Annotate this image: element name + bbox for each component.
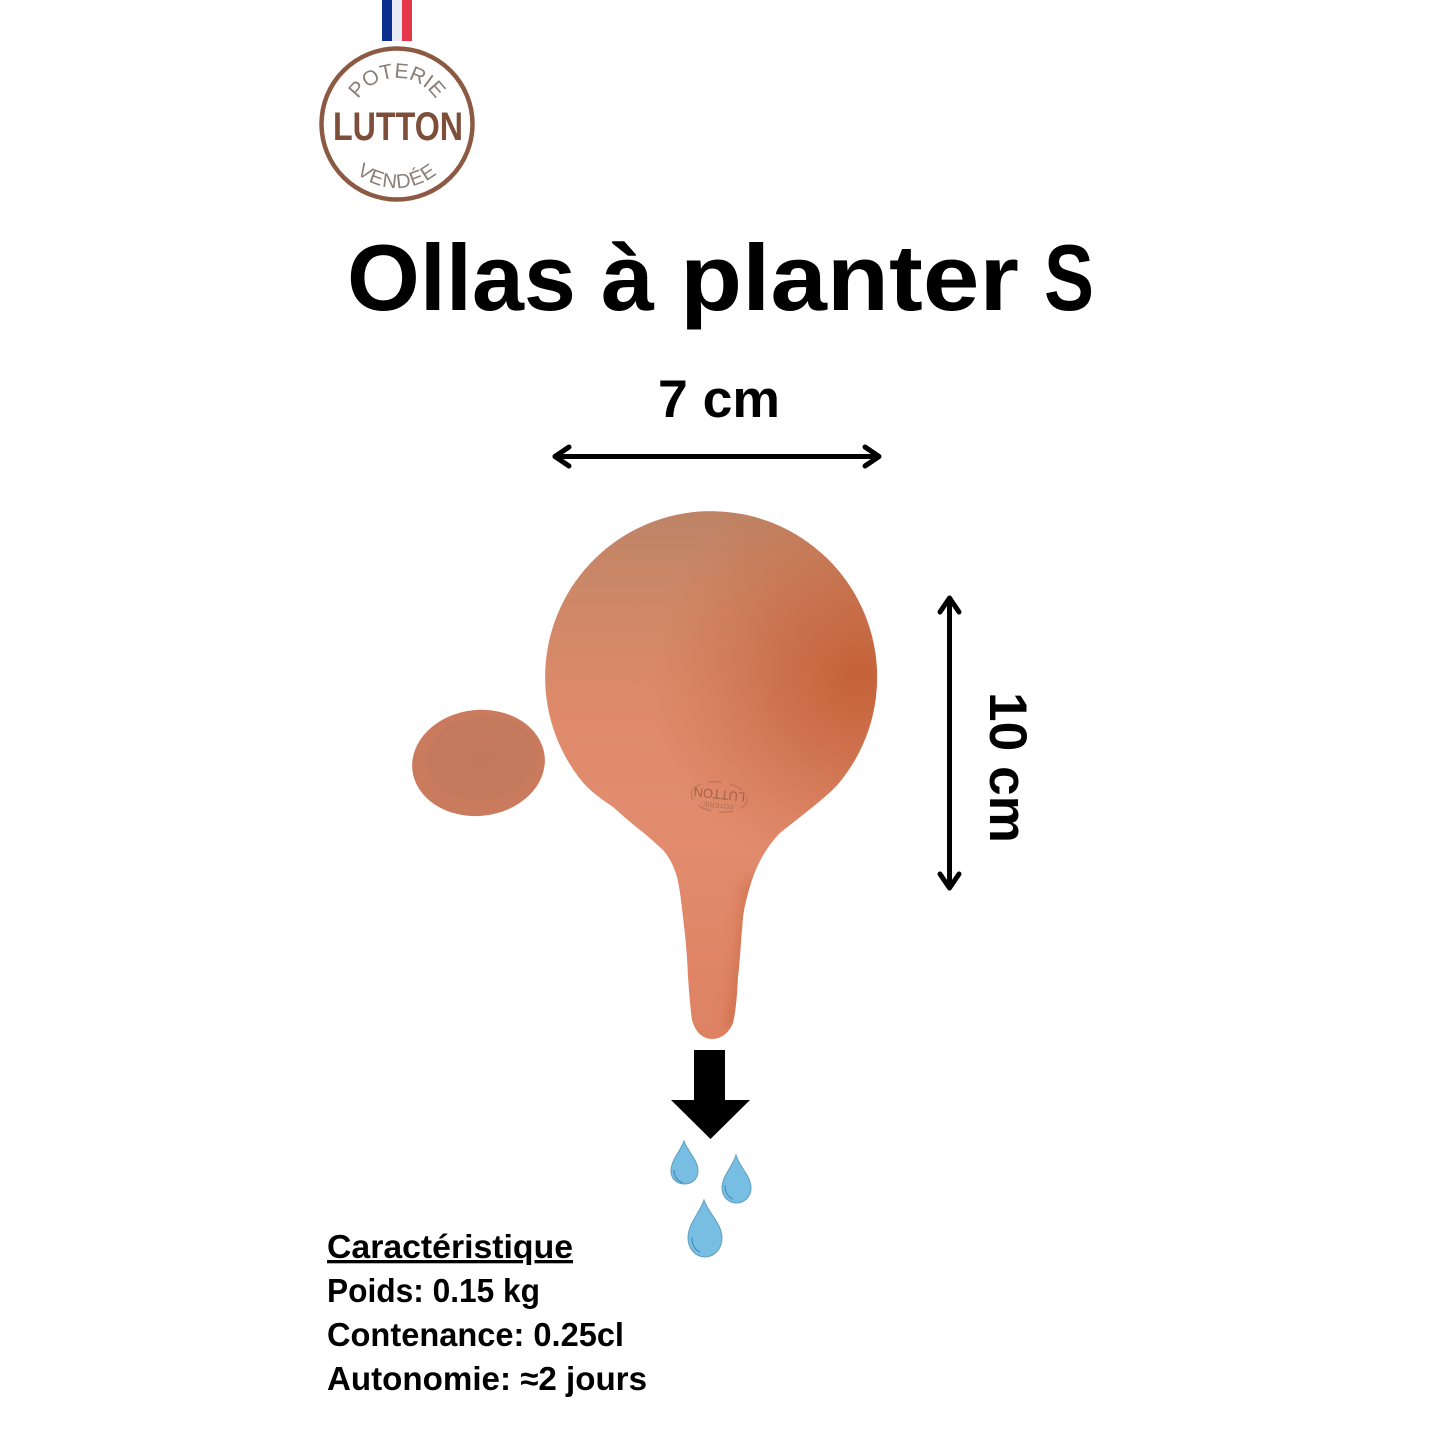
height label: 10 cm: 10 cm [978,692,1037,843]
arrow: height dimension [940,598,959,888]
weight: Poids: 0.15 kg [327,1272,540,1309]
saucer lid [407,703,550,823]
capacity: Contenance: 0.25cl [327,1316,624,1353]
logo text: VENDÉE: VENDÉE [360,162,436,188]
icon: water drop right [722,1155,751,1203]
icon: French flag ribbon [382,0,412,41]
title: S [1044,225,1094,330]
width label: 7 cm: 7 cm [658,370,780,429]
logo text: POTERIE: POTERIE [348,63,446,98]
logo text: LUTTON: LUTTON [333,105,463,149]
characteristics text block [327,1228,647,1397]
heading: Caractéristique: Caractéristique [327,1228,573,1265]
arrow: width dimension [555,447,879,466]
logo: Poterie Lutton medal [319,0,475,202]
stamp: Lutton: POTERIE [702,799,734,810]
stamp: Lutton: LUTTON [693,784,746,805]
terracotta olla [545,511,877,1039]
icon: water drop bottom [688,1200,722,1257]
title: planter [680,225,1019,330]
logo ring [322,48,472,200]
autonomy: Autonomie: ≈2 jours [327,1360,647,1397]
title: Ollas [347,225,576,330]
water drops [671,1141,751,1257]
icon: water drop left [671,1141,698,1184]
title: à [601,225,655,330]
title [347,225,1094,330]
arrow: water flows down [671,1050,750,1139]
infographic canvas [319,0,1092,1397]
stamp: Lutton [690,779,749,815]
